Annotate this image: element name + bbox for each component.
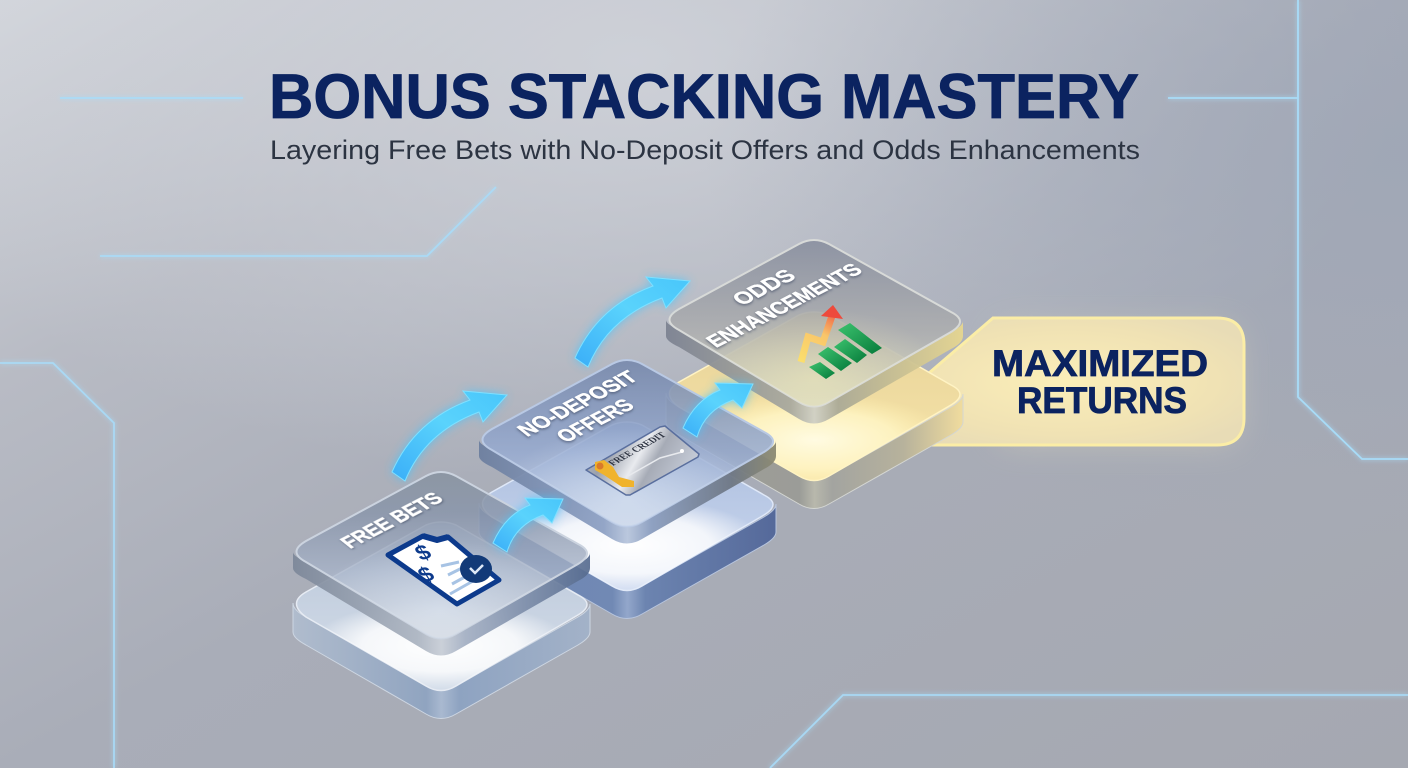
label: odds enhancements: ENHANCEMENTS <box>701 259 867 351</box>
callout: maximized returns <box>890 318 1244 445</box>
stack 3: odds enhancements glass plate <box>666 239 963 424</box>
stack 1: free bets glass plate <box>293 471 590 656</box>
icon: betting slip: $ <box>413 561 439 587</box>
icon: betting slip: $ <box>410 539 436 565</box>
stack 2: no-deposit base <box>479 422 776 618</box>
arrow: free bets to no-deposit upper <box>392 391 507 481</box>
arrow: free bets to no-deposit lower <box>493 498 563 552</box>
icon: free credit card: FREE CREDIT <box>605 430 669 467</box>
label: no-deposit offers: NO-DEPOSIT <box>512 367 643 440</box>
callout text <box>992 343 1208 421</box>
icon: betting slip <box>388 536 499 604</box>
arrow: no-deposit to odds lower <box>683 383 753 437</box>
icon: free credit card <box>586 426 699 495</box>
label: no-deposit offers: OFFERS <box>551 395 639 446</box>
subtitle: Layering Free Bets with No-Deposit Offers and Odds Enhancements <box>270 135 1140 165</box>
stack 1: free bets base <box>293 522 590 718</box>
icon: bar chart with rising arrow <box>801 305 882 379</box>
title: BONUS STACKING MASTERY <box>269 62 1139 132</box>
stack 3: odds enhancements base <box>666 312 963 508</box>
callout text: RETURNS <box>1017 380 1187 421</box>
label: odds enhancements: ODDS <box>727 265 801 309</box>
arrow: no-deposit to odds upper <box>575 277 690 367</box>
label: free bets: FREE BETS <box>335 488 448 552</box>
callout text: MAXIMIZED <box>992 343 1208 384</box>
stack 2: no-deposit glass plate <box>479 359 776 544</box>
